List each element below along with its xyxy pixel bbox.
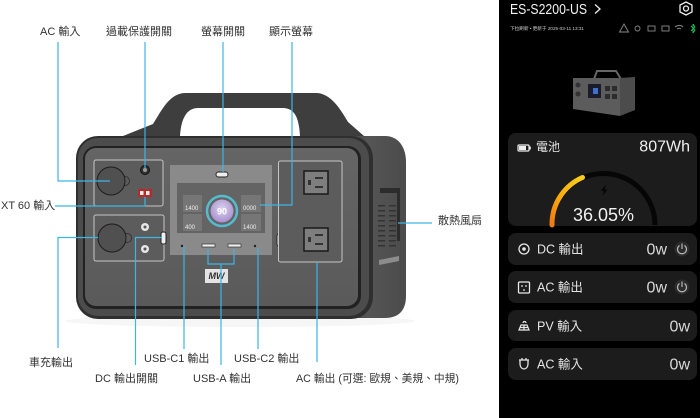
card: battery [508,133,697,226]
AC outlet switch [277,234,281,246]
logo badge [205,269,228,283]
row: DC output: 0w [647,242,667,258]
vent handle strip [379,256,399,265]
gauge level [552,178,582,225]
label: screen switch: 螢幕開關 [201,24,245,38]
row: AC input: 0w [670,356,690,374]
label: AC output: AC 輸出 (可選: 歐規、美規、中規) [296,371,459,385]
label: USB-C2: USB-C2 輸出 [234,351,299,365]
DC switch [161,232,166,244]
label: AC input: AC 輸入 [40,24,80,38]
battery percentage: 36.05% [573,205,634,225]
front frame [76,136,373,319]
side housing [330,136,406,318]
label: USB-C1: USB-C1 輸出 [144,351,209,365]
panel: car charger and DC [94,215,164,261]
label: display: 顯示螢幕 [269,24,313,38]
leader lines [55,42,432,365]
row: AC input: AC 輸入 [537,356,583,372]
row: AC input [508,348,697,380]
battery heading: 電池 [536,140,560,154]
cooling vents [378,188,400,246]
panel: app screen [499,0,700,418]
panel: display module: 90 [217,206,227,216]
label: DC switch: DC 輸出開關 [95,371,158,385]
row: AC output: AC 輸出 [537,280,583,294]
front face [85,148,358,306]
row: AC output: 0w [647,280,667,296]
panel: display module [170,165,272,255]
row: PV input: 0w [670,318,690,336]
logo badge: MW [208,271,226,281]
power station product illustration [65,93,415,327]
panel: AC input and XT60 [94,160,163,206]
battery energy value: 807Wh [639,138,690,156]
panel: display module: 1400 [185,206,199,212]
label: cooling fan: 散熱風扇 [438,213,482,227]
label: car charger: 車充輸出 [29,355,73,369]
panel: AC outlets [278,161,342,262]
handle [123,93,364,136]
row: PV input [508,310,697,341]
refresh timestamp: 下拉刷新 • 更新于 2025-03-11 13:31 [510,25,584,32]
label: USB-A: USB-A 輸出 [193,371,251,385]
row: PV input: PV 輸入 [537,318,583,334]
icon: charging bolt [601,184,608,196]
row: DC output: DC 輸出 [537,242,584,256]
label: overload switch: 過載保護開關 [106,24,172,38]
row: DC output [508,233,697,265]
label: XT60: XT 60 輸入 [1,198,55,212]
row: AC output [508,271,697,303]
gauge track [552,174,655,225]
floor shadow [65,315,415,327]
device title: ES-S2200-US [510,2,587,18]
icon: settings gear [680,2,692,15]
status icons [620,24,695,33]
panel: display module: 0000 [243,206,257,212]
chevron [595,4,600,14]
icon: battery [518,145,531,151]
panel: display module: 1400 [243,225,257,231]
panel: display module: 400 [185,225,196,231]
thumbnail power station [573,71,635,116]
callout labels [1,24,482,385]
